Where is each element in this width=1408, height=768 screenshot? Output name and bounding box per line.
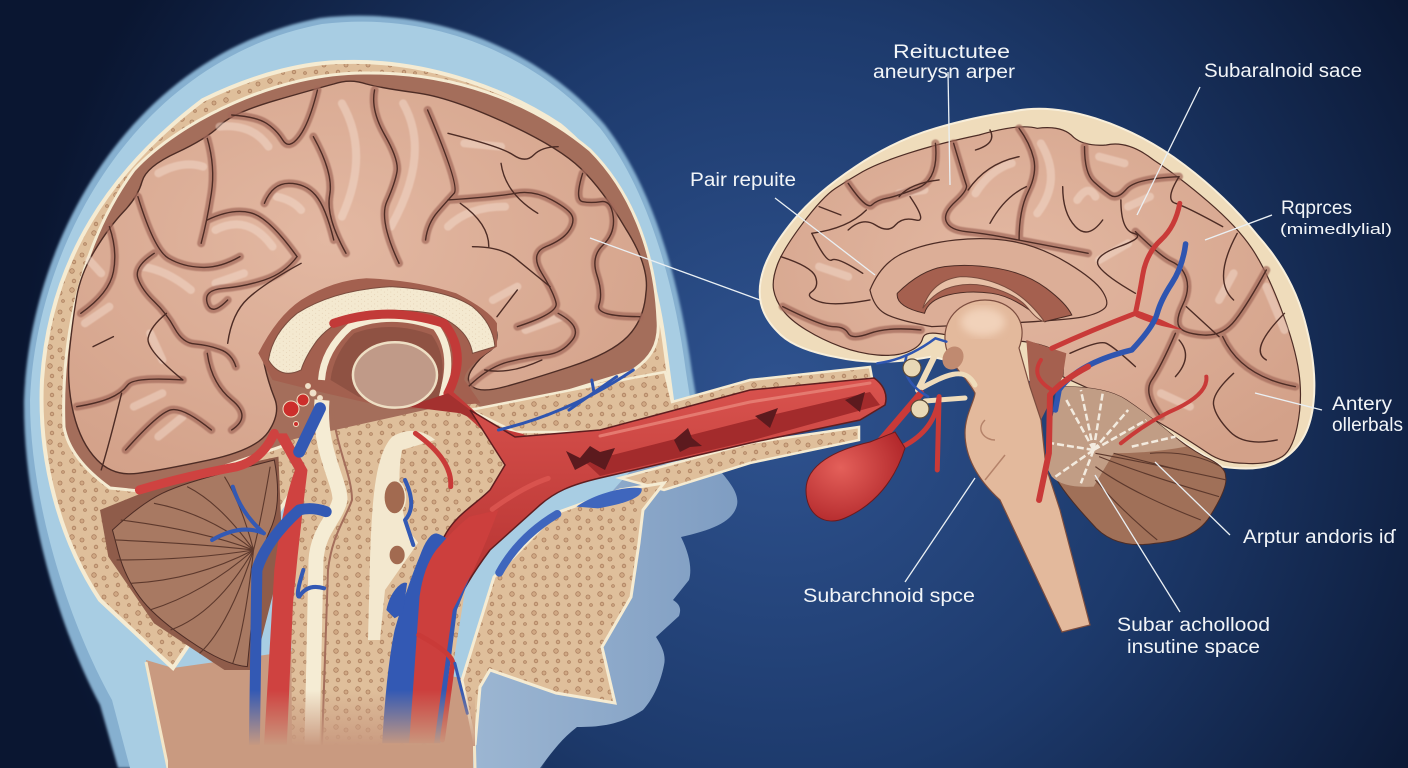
- cream arches: [322, 318, 448, 397]
- nerve rings: [903, 359, 929, 418]
- small blue twig: [298, 570, 324, 597]
- cerebellum folia: [115, 467, 270, 663]
- cervical outline: [322, 385, 352, 745]
- cerebellum body: [112, 460, 278, 667]
- panel: head cross-section: [24, 16, 886, 768]
- skull bone band: [42, 62, 672, 668]
- large brain group: [69, 81, 646, 474]
- artery lumen shading: [585, 392, 880, 476]
- red branch upper: [1052, 203, 1180, 348]
- thalamus: [353, 342, 437, 408]
- blue beside ovals: [405, 480, 413, 545]
- corpus callosum: [268, 287, 495, 373]
- brain base blue vessels: [498, 370, 633, 430]
- sulci shadows: [77, 90, 640, 450]
- brain cavity: [64, 73, 658, 492]
- head silhouette glow: [24, 16, 700, 768]
- cerebellum light fan: [1046, 387, 1186, 487]
- cream nerve upper: [918, 345, 940, 390]
- right sulci lines: [781, 128, 1295, 442]
- left carotid branch: [139, 433, 274, 490]
- red lower branch: [1121, 377, 1206, 443]
- small red vessel: [415, 433, 451, 487]
- neck tissue: [146, 650, 473, 768]
- label: subar achollood: Subar achollood: [1117, 615, 1270, 636]
- label: antery: Antery: [1332, 394, 1393, 415]
- right brain vessels: [875, 203, 1206, 500]
- gyri highlights: [85, 103, 562, 437]
- neck base fill: [168, 745, 473, 768]
- label: rqprces: Rqprces: [1281, 198, 1352, 219]
- neck cream edges: [146, 662, 475, 768]
- artery ruptures: [566, 392, 865, 470]
- blue lozenge two: [576, 488, 642, 508]
- icon: ruptured aneurysm sac: [806, 432, 905, 521]
- thin red crossing: [419, 635, 453, 740]
- head inner glow: [30, 22, 695, 768]
- cervical cream strips: [312, 400, 340, 745]
- right red carotid: [409, 510, 498, 743]
- corpus callosum and thalamus group: [258, 278, 521, 438]
- right brain stem: [918, 300, 1090, 632]
- corpus callosum band: [870, 239, 1107, 327]
- inner arch cavity: [330, 327, 443, 407]
- label: mimedlylial: (mimedlylial): [1280, 221, 1392, 238]
- inner bone of blob: [400, 440, 498, 545]
- lower brain dark strip: [1026, 340, 1066, 420]
- jaw bone tissue: [462, 483, 664, 745]
- neck vessels: [139, 370, 642, 747]
- label: pair repuite: Pair repuite: [690, 170, 796, 191]
- cream nerve branch: [918, 374, 975, 401]
- red loop: [1037, 360, 1052, 390]
- right sulci shadows: [783, 128, 1295, 417]
- cerebellum brown body: [1053, 387, 1226, 545]
- left jugular: [254, 509, 326, 745]
- face profile: [470, 460, 737, 768]
- ovals: [384, 481, 405, 565]
- blue lozenge one: [499, 514, 557, 573]
- brain outer membrane: [760, 109, 1314, 469]
- label line two: aneurysn arper: [873, 62, 1016, 83]
- upper bone band: [470, 367, 872, 432]
- red branch tail: [1135, 310, 1183, 330]
- small brown ellipse: [938, 343, 968, 373]
- pons shadow marks: [981, 420, 1005, 480]
- artery highlight: [600, 383, 870, 436]
- label: insutine space: insutine space: [1127, 637, 1260, 658]
- corpus inner lumen: [897, 265, 1072, 322]
- blue twig top: [569, 377, 617, 410]
- aneurysm feeder: [875, 393, 921, 447]
- main artery trunk: [444, 378, 886, 612]
- lower bone band: [620, 427, 859, 490]
- right blue jugular: [382, 533, 471, 743]
- blue loop: [877, 338, 946, 397]
- right gyri highlights: [819, 143, 1284, 407]
- left carotid: [264, 433, 308, 747]
- label: reitucuttee: Reituctutee: [893, 42, 1010, 63]
- label: subarchnoid spce: Subarchnoid spce: [803, 586, 975, 607]
- thin blue fragment: [455, 663, 467, 713]
- label: arptur andoris id: Arptur andoris iɗ: [1243, 527, 1397, 548]
- callout leader lines: [590, 72, 1322, 612]
- cavity behind cerebellum: [100, 457, 283, 670]
- large brain body: [69, 81, 646, 474]
- top blue vessel: [299, 408, 320, 452]
- cerebellum left: [100, 457, 283, 670]
- panel: right brain: [760, 109, 1314, 469]
- blue vessel: [1055, 244, 1186, 410]
- sinus cream blob: [368, 431, 480, 640]
- midbrain highlight: [961, 308, 1005, 336]
- sulci lines: [77, 90, 640, 470]
- sinus arch artery: [334, 314, 521, 438]
- aneurysm cluster: [283, 384, 322, 426]
- label: ollerbals: ollerbals: [1332, 415, 1403, 436]
- red main lower: [1039, 367, 1088, 500]
- label: subaralnoid sace: Subaralnoid sace: [1204, 61, 1362, 82]
- fornix band: [923, 277, 1045, 322]
- vessel fade at neck base: [245, 690, 475, 746]
- brain stem body: [945, 300, 1090, 632]
- brown folia: [1095, 453, 1226, 540]
- artery slash: [492, 478, 548, 509]
- sinus wedge: [407, 393, 497, 430]
- dark arch cavity: [258, 278, 497, 410]
- jugular branches: [212, 487, 264, 540]
- white arbor lines: [1052, 390, 1175, 483]
- right brain cortex: [773, 127, 1300, 464]
- right cerebellum: [1046, 387, 1226, 545]
- aneurysm side vessel: [903, 397, 939, 470]
- central bone column: [290, 400, 530, 745]
- blue side lobe: [386, 583, 407, 618]
